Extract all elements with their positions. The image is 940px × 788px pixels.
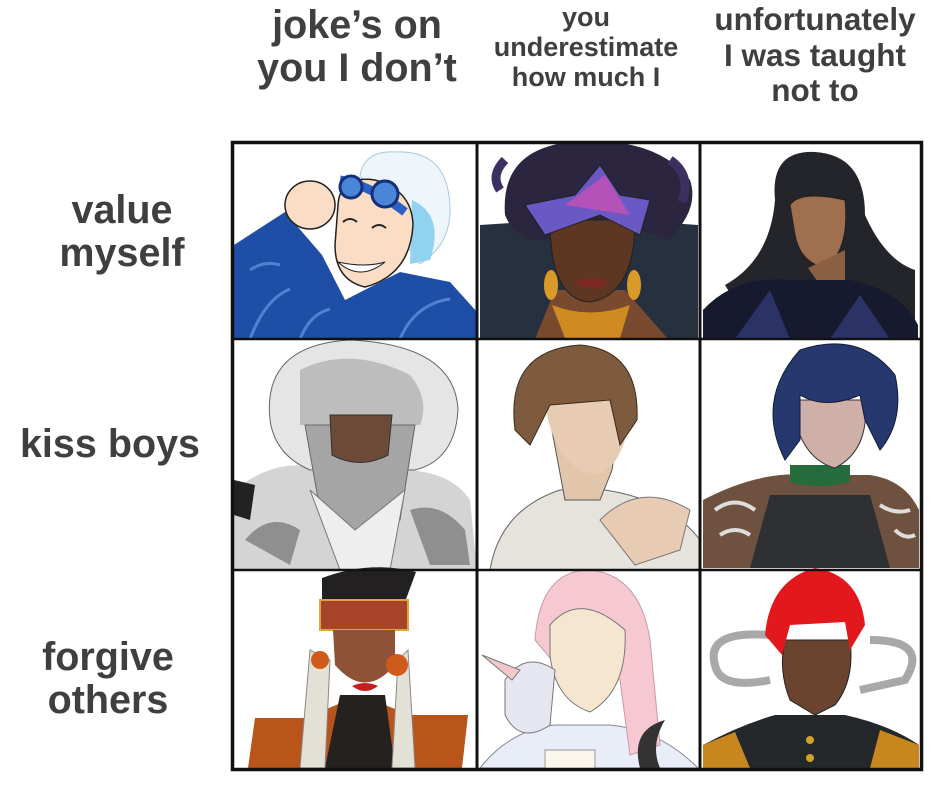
row heading: forgive others: forgive xyxy=(42,635,174,679)
portrait: long black hair character xyxy=(701,144,921,339)
column heading: joke's on you I don't xyxy=(257,3,457,90)
column heading: you underestimate how much I xyxy=(494,2,678,92)
column heading: unfortunately I was taught not to: unfortunately xyxy=(714,1,916,37)
row heading: value myself: myself xyxy=(59,231,185,275)
column heading: you underestimate how much I: you xyxy=(562,2,610,32)
portrait: ornate headdress character xyxy=(234,567,477,769)
row heading: value myself xyxy=(59,188,185,275)
portrait: red hair character xyxy=(701,568,921,769)
column heading: joke's on you I don't: joke’s on xyxy=(272,3,442,47)
column heading: unfortunately I was taught not to xyxy=(714,1,916,108)
row heading: forgive others: others xyxy=(48,678,168,722)
row heading: value myself: value xyxy=(71,188,172,232)
portrait: goggles character xyxy=(234,144,477,339)
column heading: you underestimate how much I: underestimate xyxy=(494,32,678,62)
row heading: kiss boys: kiss boys xyxy=(20,422,200,466)
portrait: pink hair character with rabbit xyxy=(478,570,700,769)
row heading: forgive others xyxy=(42,635,174,722)
portrait: fur hat character xyxy=(234,340,477,570)
grid lines xyxy=(232,142,922,770)
portrait: blue hair character xyxy=(701,340,921,570)
column heading: unfortunately I was taught not to: not to xyxy=(771,72,859,108)
portrait: brown hair character xyxy=(478,340,700,570)
column heading: joke's on you I don't: you I don’t xyxy=(257,46,457,90)
column heading: unfortunately I was taught not to: I was taught xyxy=(724,36,906,72)
column heading: you underestimate how much I: how much I xyxy=(512,62,660,92)
portrait: headwrap character xyxy=(478,141,700,339)
